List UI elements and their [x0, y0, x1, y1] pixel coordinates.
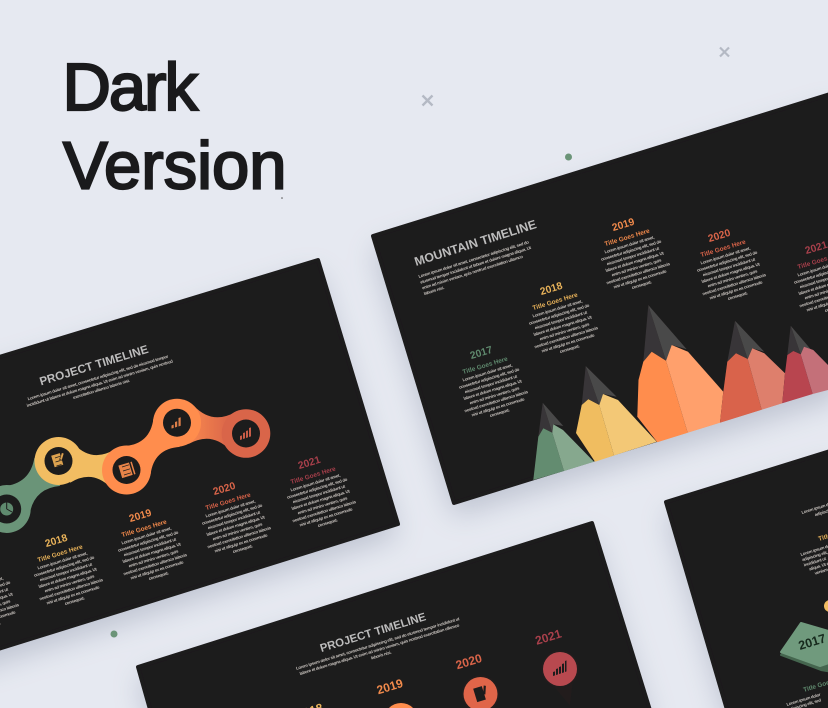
block 2019: Lorem ipsum dolor sit amet,: [604, 235, 655, 254]
intro text: exercitation ullamco laboris nisi.: [72, 378, 130, 400]
node: 2021: [222, 409, 270, 458]
block 2019: nostrud exercitation ullamco laboris: [123, 552, 188, 576]
block 2018: nisi ut aliquip ex ea commodo: [541, 332, 595, 353]
block 2019: nisi ut aliquip ex ea commodo: [130, 559, 184, 580]
block 2020: 2020: [212, 481, 237, 498]
decorative star: [720, 48, 729, 56]
block 2021: consequat.: [317, 517, 338, 528]
block 2019: enim ad minim veniam, quis: [128, 548, 179, 568]
block 2020: nostrud exercitation ullamco laboris: [702, 272, 767, 296]
text fragment: veniam: [814, 567, 828, 576]
pin 2021: [534, 626, 579, 706]
block 2019: nisi ut aliquip ex ea commodo: [613, 268, 667, 289]
text fragment: incididunt ut: [803, 556, 827, 567]
block 2017: [448, 338, 533, 425]
block 2018: Lorem ipsum dolor sit amet,: [37, 551, 88, 570]
intro text: laboris nisi.: [370, 650, 392, 661]
block 2021: Lorem ipsum dolor sit amet,: [290, 473, 341, 492]
heading: PROJECT TIMELINE: [319, 611, 428, 655]
node: 2020: [153, 399, 201, 447]
block 2020: 2020: [707, 228, 732, 245]
block 2020: eiusmod tempor incididunt ut: [207, 509, 261, 530]
pin 2020: [454, 651, 500, 708]
panel background: [666, 448, 828, 708]
heading: MOUNTAIN TIMELINE: [413, 217, 538, 269]
block 2019: consequat.: [631, 279, 652, 290]
block 2017: enim ad minim veniam, quis: [469, 385, 520, 405]
pin 2019: [375, 676, 420, 708]
intro text: laboris nisi.: [423, 285, 445, 296]
block 2017: consequat.: [489, 407, 510, 418]
intro text: eiusmod tempor incididunt ut labore et dolore magna aliqua. Ut: [420, 245, 532, 285]
pin 2019: 2019: [375, 676, 405, 697]
block 2020: nisi ut aliquip ex ea commodo: [214, 532, 268, 553]
chain timeline: [0, 399, 270, 533]
block 2019: 2019: [128, 508, 153, 525]
block 2020: consectetur adipiscing elit, sed do: [201, 503, 263, 526]
mountain: yellow: [576, 366, 657, 462]
block 2020: labore et dolore magna aliqua. Ut: [206, 514, 266, 537]
block 2017: [0, 573, 24, 638]
intro text: enim ad minim veniam, quis nostrud exercitation ullamco: [421, 254, 524, 290]
decorative star: [422, 96, 432, 106]
panel: mountain timeline: [373, 91, 828, 503]
block 2018: [518, 274, 603, 361]
intro text: labore et dolore magna aliqua. Ut enim ad minim veniam, quis nostrud exercitation ullamco: [299, 622, 460, 676]
block 2019: consequat.: [148, 570, 169, 581]
block 2018: eiusmod tempor incididunt ut: [534, 309, 588, 330]
badge 2017: [781, 623, 828, 672]
block 2019: labore et dolore magna aliqua. Ut: [122, 541, 182, 564]
intro text: Lorem ipsum dolor sit amet, consectetur adipiscing elit, sed do eiusmod tempor incididunt ut: [295, 616, 461, 671]
block 2019: 2019: [611, 217, 636, 234]
block 2021: [276, 448, 361, 535]
block 2018: labore et dolore magna aliqua. Ut: [38, 566, 98, 589]
block 2019: consectetur adipiscing elit, sed do: [600, 239, 662, 262]
panel background: [0, 260, 398, 661]
block 2020: Title Goes Here: [700, 239, 747, 259]
block 2018: nostrud exercitation ullamco laboris: [534, 325, 599, 349]
block 2018: enim ad minim veniam, quis: [539, 321, 590, 341]
node dot: [824, 600, 828, 612]
block 2017: Title Goes Here: [462, 356, 509, 376]
block 2021: eiusmod tempor incididunt ut: [292, 483, 346, 504]
mountain: red: [720, 321, 785, 423]
decorative dot: [110, 630, 118, 638]
node: 2017: [0, 485, 31, 533]
block 2020: enim ad minim veniam, quis: [707, 268, 758, 288]
block 2019: [107, 501, 192, 588]
block 2017: consectetur adipiscing elit, sed do: [458, 367, 520, 390]
block 2020: [191, 474, 276, 561]
block 2018: consectetur adipiscing elit, sed do: [33, 555, 95, 578]
block 2018: labore et dolore magna aliqua. Ut: [533, 314, 593, 337]
pin 2021: 2021: [534, 626, 563, 648]
block 2020: nostrud exercitation ullamco laboris: [207, 525, 272, 549]
block 2021: nostrud exercitation ullamco laboris: [292, 499, 357, 523]
block 2020: consequat.: [232, 543, 253, 554]
panel background: [138, 523, 653, 708]
block 2019: labore et dolore magna aliqua. Ut: [605, 250, 665, 273]
panel: project timeline chain: [0, 260, 398, 661]
panel background: [373, 91, 828, 503]
block 2017: 2017: [469, 345, 494, 362]
intro text: Lorem ipsum dolor sit amet, consectetur adipiscing elit, sed do eiusmod tempor: [27, 354, 169, 401]
mountains: [533, 305, 828, 480]
block 2018: consequat.: [559, 343, 580, 354]
block 2018: consequat.: [64, 595, 85, 606]
block 2019: eiusmod tempor incididunt ut: [606, 245, 660, 266]
node: 2019: [102, 446, 151, 494]
block 2018: nostrud exercitation ullamco laboris: [39, 577, 104, 601]
panel: project timeline pins: [138, 523, 653, 708]
block 2020: eiusmod tempor incididunt ut: [702, 256, 756, 277]
block 2017: nisi ut aliquip ex ea commodo: [471, 396, 525, 417]
block 2021: 2021: [297, 455, 322, 472]
title: Dark Version: Version: [63, 128, 286, 204]
block 2021: consectetur adipiscing elit, sed do: [286, 477, 348, 500]
panel: partial timeline, right edge: [666, 448, 828, 708]
decorative dot: [281, 197, 283, 199]
block 2019: consectetur adipiscing elit, sed do: [117, 530, 179, 553]
node: 2018: [34, 437, 82, 485]
intro text: Lorem ipsum dolor sit amet, consectetur adipiscing elit, sed do: [418, 239, 530, 279]
mountain: green: [533, 403, 594, 480]
block 2021: [783, 233, 828, 320]
block 2018: eiusmod tempor incididunt ut: [39, 561, 93, 582]
block 2018: Lorem ipsum dolor sit amet,: [532, 299, 583, 318]
block 2018: nisi ut aliquip ex ea commodo: [46, 584, 100, 605]
connector: green to yellow: [4, 458, 60, 514]
text fragment: Lorem ipsum dolor: [786, 692, 821, 707]
block 2020: Lorem ipsum dolor sit amet,: [700, 246, 751, 265]
block 2020: Title Goes Here: [205, 492, 252, 512]
title: Dark Version: Dark: [62, 50, 198, 125]
block 2020: consequat.: [727, 290, 748, 301]
badge 2017: 2017: [797, 631, 828, 653]
block 2019: eiusmod tempor incididunt ut: [123, 536, 177, 557]
block 2018: consectetur adipiscing elit, sed do: [528, 303, 590, 326]
block 2018: Title Goes Here: [37, 544, 84, 564]
connector: orange to orange: [124, 419, 180, 474]
block 2018: Title Goes Here: [532, 292, 579, 312]
intro text: incididunt ut labore et dolore magna aliqua. Ut enim ad minim veniam, quis nostrud: [26, 358, 174, 408]
block 2018: 2018: [539, 281, 564, 298]
block 2018: enim ad minim veniam, quis: [44, 573, 95, 593]
mountain: crimson: [782, 326, 828, 403]
block 2019: Title Goes Here: [121, 519, 168, 539]
block 2019: Title Goes Here: [604, 228, 651, 248]
block 2018: 2018: [44, 533, 69, 550]
title: Dark Version: [62, 50, 286, 204]
connector: orange to red: [188, 406, 236, 450]
block 2019: Lorem ipsum dolor sit amet,: [121, 526, 172, 545]
block 2018: [23, 526, 108, 613]
mountain: orange: [637, 305, 723, 442]
heading: PROJECT TIMELINE: [38, 343, 150, 388]
block 2017: eiusmod tempor incididunt ut: [464, 373, 518, 394]
block 2021: Title Goes Here: [290, 466, 337, 486]
block 2017: labore et dolore magna aliqua. Ut: [463, 378, 523, 401]
block 2020: consectetur adipiscing elit, sed do: [696, 250, 758, 273]
block 2019: [590, 210, 675, 297]
block 2020: nisi ut aliquip ex ea commodo: [709, 279, 763, 300]
block 2020: enim ad minim veniam, quis: [212, 521, 263, 541]
block 2017: Lorem ipsum dolor sit amet,: [462, 363, 513, 382]
connector: yellow to orange: [70, 445, 115, 487]
block 2017: nostrud exercitation ullamco laboris: [464, 389, 529, 413]
block 2019: nostrud exercitation ullamco laboris: [606, 261, 671, 285]
block 2021: nisi ut aliquip ex ea commodo: [299, 506, 353, 527]
pin 2020: 2020: [454, 651, 484, 672]
block 2021: enim ad minim veniam, quis: [297, 495, 348, 515]
block 2020: Lorem ipsum dolor sit amet,: [205, 499, 256, 518]
decorative dot: [565, 154, 572, 160]
block 2019: enim ad minim veniam, quis: [611, 257, 662, 277]
block 2021: labore et dolore magna aliqua. Ut: [291, 488, 351, 511]
block 2020: labore et dolore magna aliqua. Ut: [701, 261, 761, 284]
block 2020: [686, 221, 771, 308]
